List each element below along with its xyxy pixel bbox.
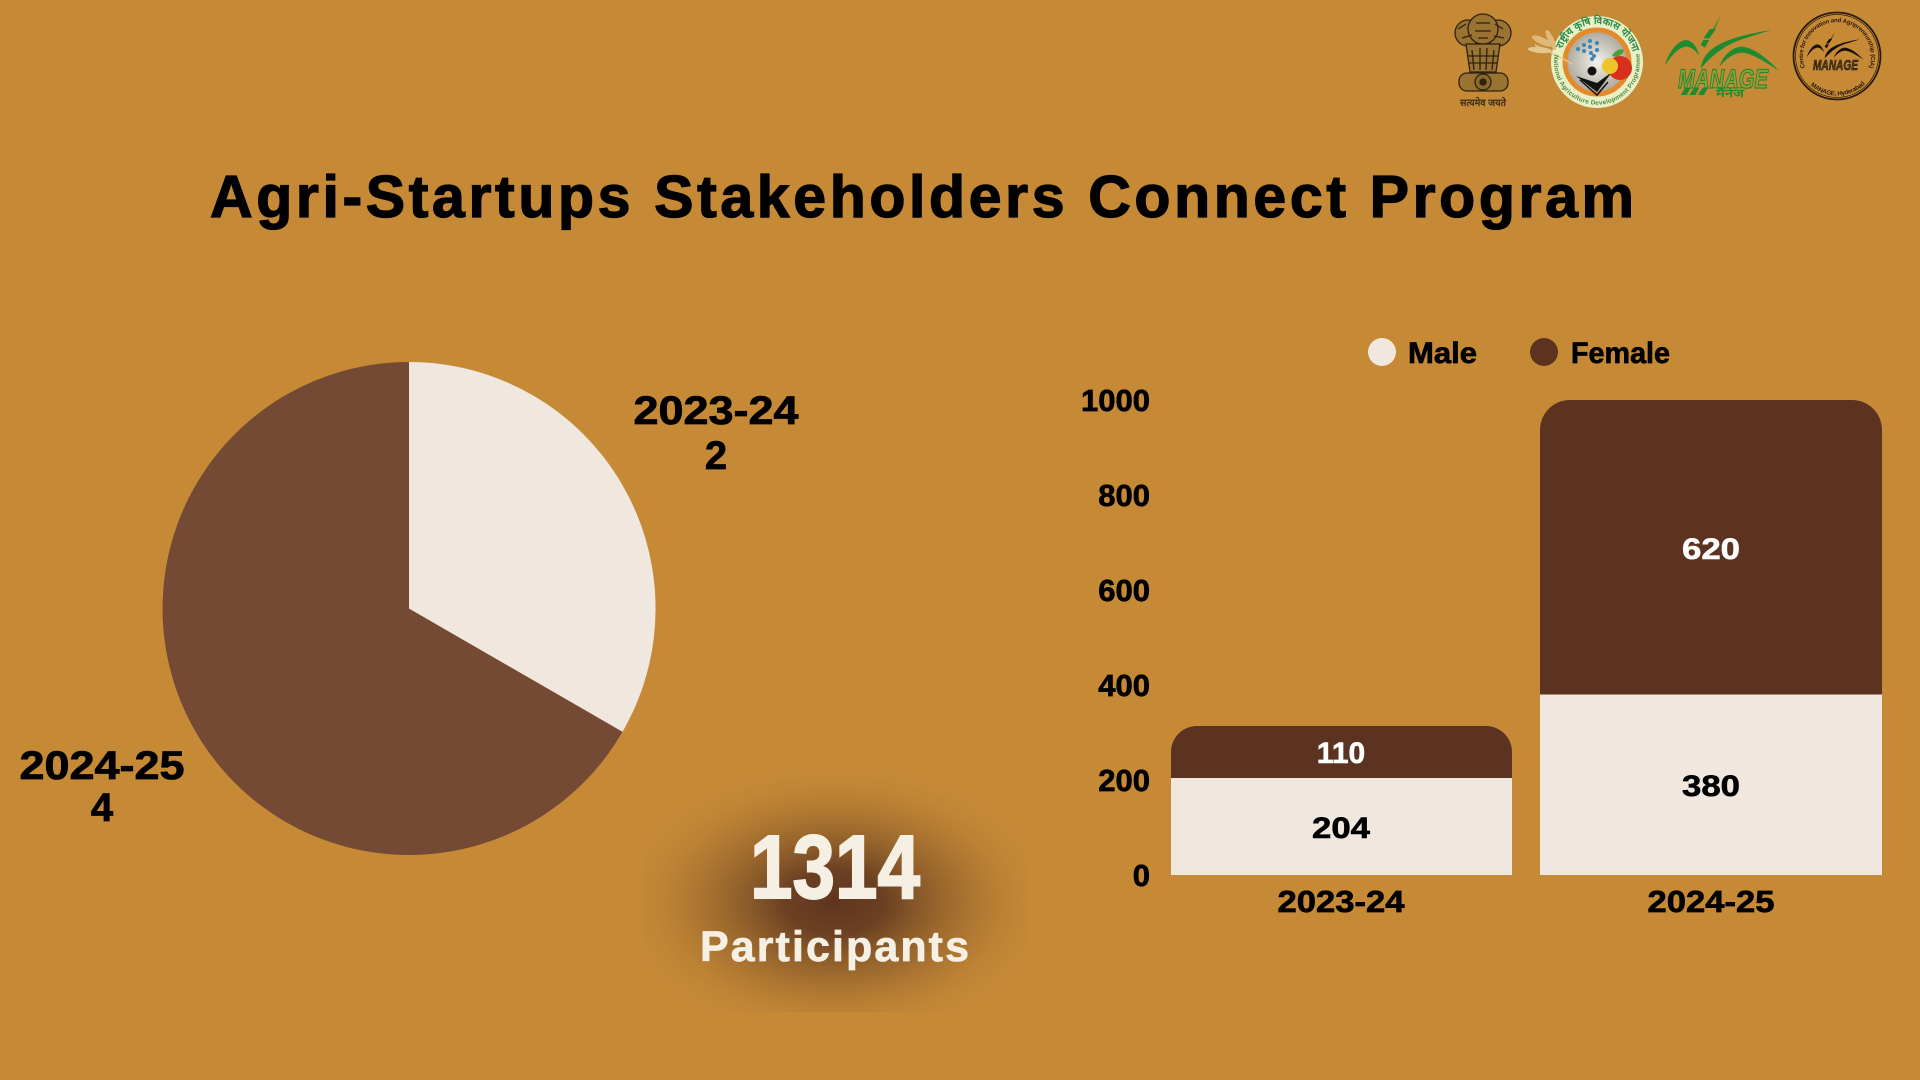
pie label: 2023-24: 2: [705, 434, 727, 478]
icon: National Agriculture Development Programme seal: [1528, 14, 1643, 108]
callout: total participants: [643, 768, 1027, 1012]
x axis labels: 2023-24: [1278, 884, 1405, 919]
bar: 2024-25: 380: [1682, 770, 1740, 803]
stacked bar chart: male and female participants: [1081, 337, 1882, 919]
icon: National Agriculture Development Programme seal: National Agriculture Development Programme: [1554, 54, 1640, 105]
icon: MANAGE logo: मैनेज: [1715, 86, 1745, 100]
x axis labels: [1278, 884, 1774, 919]
icon: MANAGE logo: MANAGE: [1678, 64, 1769, 94]
logos row: [1454, 12, 1882, 109]
legend: Female: [1571, 337, 1670, 370]
y axis labels: 1000: [1081, 383, 1150, 418]
icon: National Agriculture Development Programme seal: राष्ट्रीय कृषि विकास योजना: [1556, 14, 1640, 52]
pie slice: 2023-24: [409, 362, 656, 732]
icon: national emblem of India: सत्यमेव जयते: [1459, 96, 1507, 109]
callout number: 1314: [750, 818, 920, 918]
title: Agri-Startups Stakeholders Connect Program: [210, 164, 1634, 230]
pie label: 2023-24: 2023-24: [634, 389, 799, 433]
icon: CIA MANAGE round seal: Centre for Innovation and Agripreneurship (CIA): [1799, 18, 1876, 68]
callout caption: Participants: [700, 923, 969, 971]
bar: 2023-24: 110: [1317, 737, 1365, 770]
icon: CIA MANAGE round seal: MANAGE, Hyderabad: [1810, 80, 1865, 96]
pie label: 2024-25: 4: [91, 786, 114, 830]
pie chart: workshops per year: [20, 362, 799, 855]
legend: Male: [1408, 337, 1477, 370]
icon: MANAGE logo: [1665, 15, 1779, 100]
bar: 2024-25: 620: [1682, 533, 1740, 566]
bar: 2024-25: [1540, 400, 1882, 875]
icon: national emblem of India: [1455, 14, 1511, 109]
y axis labels: [1081, 383, 1150, 893]
y axis labels: 800: [1098, 478, 1150, 513]
pie slice: 2024-25: [163, 362, 622, 855]
bar: 2023-24: 204: [1312, 812, 1370, 845]
y axis labels: 0: [1133, 858, 1150, 893]
legend: [1368, 337, 1670, 370]
icon: CIA MANAGE round seal: [1792, 12, 1882, 100]
bar: 2023-24: [1171, 726, 1512, 875]
pie label: 2024-25: [20, 744, 184, 830]
y axis labels: 400: [1098, 668, 1150, 703]
pie label: 2024-25: 2024-25: [20, 744, 184, 788]
y axis labels: 600: [1098, 573, 1150, 608]
y axis labels: 200: [1098, 763, 1150, 798]
x axis labels: 2024-25: [1648, 884, 1774, 919]
icon: CIA MANAGE round seal: MANAGE: [1813, 57, 1859, 74]
pie label: 2023-24: [634, 389, 799, 478]
